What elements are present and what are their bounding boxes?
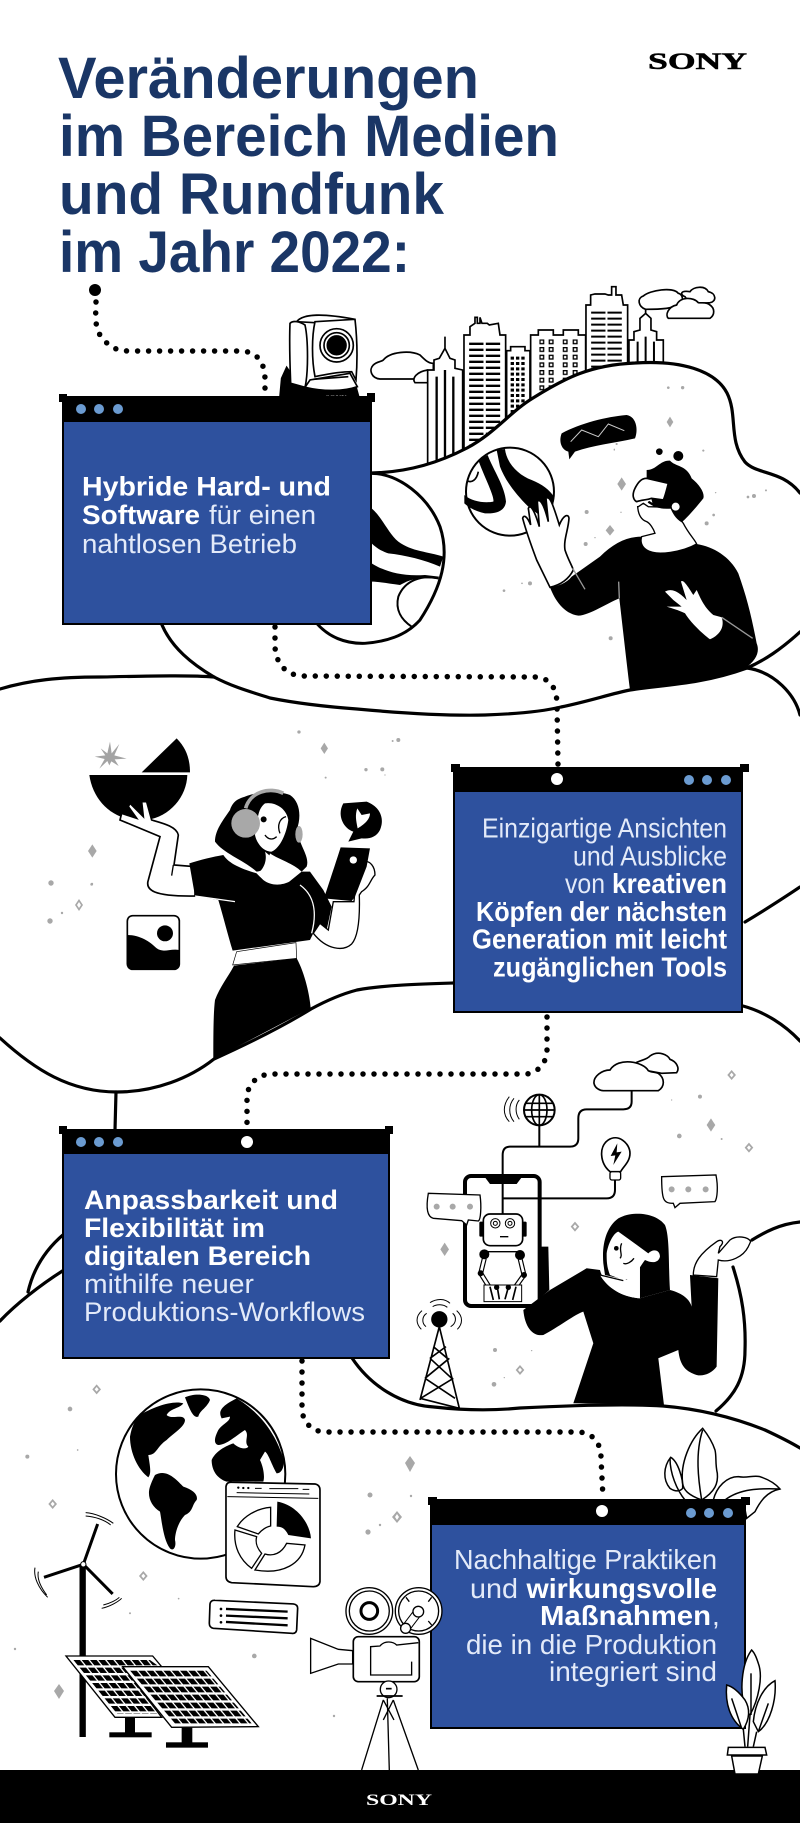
- start dot: [89, 284, 101, 296]
- icon: wedge: [142, 738, 190, 772]
- text: window two: [472, 812, 727, 982]
- text: window four: Nachhaltige Praktiken: [454, 1544, 717, 1575]
- icon: bowl: [89, 775, 187, 820]
- illustration: city skyline and clouds: [371, 287, 715, 477]
- title: Veränderungen: [58, 46, 479, 111]
- illustration: phone, robot, network, woman: [417, 1053, 751, 1408]
- robot: [478, 1214, 527, 1302]
- text: window two: kreativen: [612, 868, 727, 899]
- text: window two: Köpfen der nächsten: [476, 896, 727, 927]
- panel: window two: [451, 764, 749, 1013]
- text: window four: integriert sind: [549, 1656, 717, 1687]
- dotted connector path: [96, 302, 603, 1498]
- title: im Bereich Medien: [59, 104, 559, 169]
- plant in pot: [726, 1650, 775, 1774]
- illustration: woman with headphones, bowl and phone: [89, 738, 382, 1059]
- text: window four: wirkungsvolle: [525, 1573, 717, 1604]
- title: im Jahr 2022:: [59, 220, 410, 285]
- panel: window three: [59, 1126, 393, 1359]
- illustration: camera: SONY: [325, 394, 348, 399]
- speech bubble right: [662, 1175, 717, 1208]
- illustration: film camera on tripod: [311, 1588, 442, 1770]
- footer band: [0, 1770, 800, 1823]
- icon: radio tower: [417, 1299, 461, 1408]
- title: [58, 46, 559, 285]
- text: window four: ,: [712, 1600, 720, 1631]
- logo: Sony footer: SONY: [366, 1792, 432, 1809]
- woman: [523, 1214, 751, 1405]
- text: window two: Generation mit leicht: [472, 924, 727, 954]
- text: window two: und Ausblicke: [573, 840, 727, 872]
- panel: window one: [59, 393, 375, 625]
- text: window one: nahtlosen Betrieb: [82, 529, 297, 559]
- text: window one: Hybride Hard- und: [82, 472, 331, 502]
- icon: star: [95, 742, 127, 769]
- illustration: small ball: [464, 448, 554, 536]
- list card: [209, 1600, 298, 1633]
- text: window four: [454, 1544, 720, 1687]
- icon: phone: [324, 847, 370, 901]
- background curves: [0, 362, 800, 1448]
- plant behind window four: [665, 1428, 780, 1518]
- icon: heart bubble: [341, 802, 382, 842]
- chat bubble with line chart: [560, 415, 637, 459]
- illustration: globe with dashboard card: [116, 1389, 320, 1633]
- illustration: wind turbine: [35, 1513, 122, 1737]
- text: window three: Produktions-Workflows: [84, 1297, 365, 1327]
- title: und Rundfunk: [59, 162, 445, 227]
- icon: picture: [127, 916, 179, 969]
- speech bubble left: [427, 1193, 481, 1225]
- illustration: camera: [280, 315, 359, 399]
- illustration: person with VR headset: [523, 415, 758, 690]
- text: window four: und: [470, 1573, 518, 1604]
- clouds: [594, 1053, 678, 1091]
- text: window three: digitalen Bereich: [84, 1241, 311, 1271]
- blob cover: [372, 362, 800, 725]
- icon: globe: [504, 1095, 555, 1125]
- text: window two: von: [565, 868, 605, 899]
- illustration: solar panels: [66, 1656, 258, 1748]
- text: window two: Einzigartige Ansichten: [482, 812, 727, 844]
- text: window one: [82, 472, 331, 559]
- text: window three: Anpassbarkeit und: [84, 1185, 338, 1215]
- text: window three: Flexibilität im: [84, 1213, 265, 1243]
- panel: window four: [428, 1497, 750, 1729]
- text: window four: Maßnahmen: [540, 1600, 711, 1631]
- icon: bulb: [602, 1138, 630, 1180]
- text: window three: [84, 1185, 365, 1327]
- dashboard card: [226, 1482, 320, 1587]
- text: window one: für einen: [209, 500, 316, 530]
- text: window two: zugänglichen Tools: [493, 952, 727, 982]
- text: window three: mithilfe neuer: [84, 1269, 254, 1299]
- illustration: large ball partly behind window: [317, 473, 444, 643]
- grey specks and diamonds: [14, 386, 767, 1717]
- logo: Sony top: SONY: [648, 49, 748, 74]
- text: window one: Software: [82, 500, 200, 530]
- text: window four: die in die Produktion: [466, 1629, 717, 1660]
